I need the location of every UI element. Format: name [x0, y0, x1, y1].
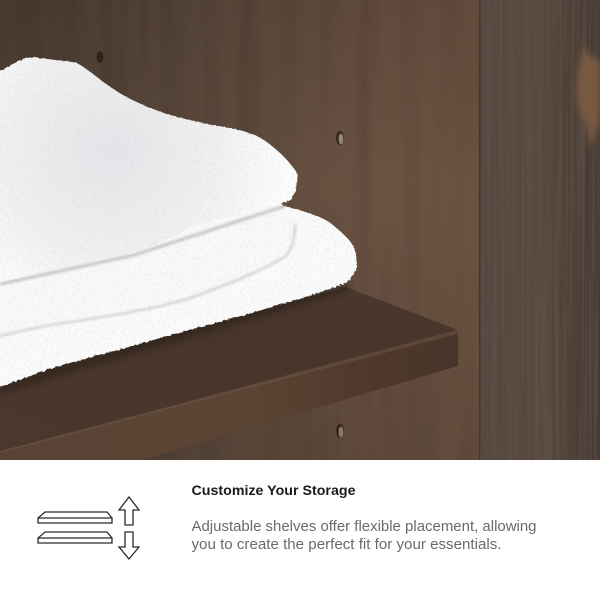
caption panel: [0, 460, 600, 600]
heading: Customize Your Storage: [192, 482, 356, 498]
shadow under towels: [0, 270, 352, 395]
icon: down arrow: [119, 532, 139, 559]
icon: up arrow: [119, 497, 139, 525]
towel: top: [0, 57, 297, 283]
icon: upper shelf: [38, 512, 112, 523]
cabinet back panel: [0, 0, 480, 460]
icon: adjustable shelves with up and down arrows: [38, 497, 139, 559]
side post: [479, 0, 600, 460]
description text: [192, 519, 536, 553]
towel: middle: [278, 203, 284, 206]
towel creases: [0, 206, 295, 336]
shelf top surface: [0, 287, 458, 451]
towel: bottom: [0, 206, 358, 387]
icon: lower shelf: [38, 532, 112, 543]
shelf peg holes: [97, 51, 344, 438]
description text: Adjustable shelves offer flexible placement, allowing: [192, 519, 536, 535]
description text: you to create the perfect fit for your essentials.: [192, 537, 502, 553]
photo: towels on a wooden shelf: [0, 0, 600, 460]
shelf front edge: [0, 331, 458, 460]
